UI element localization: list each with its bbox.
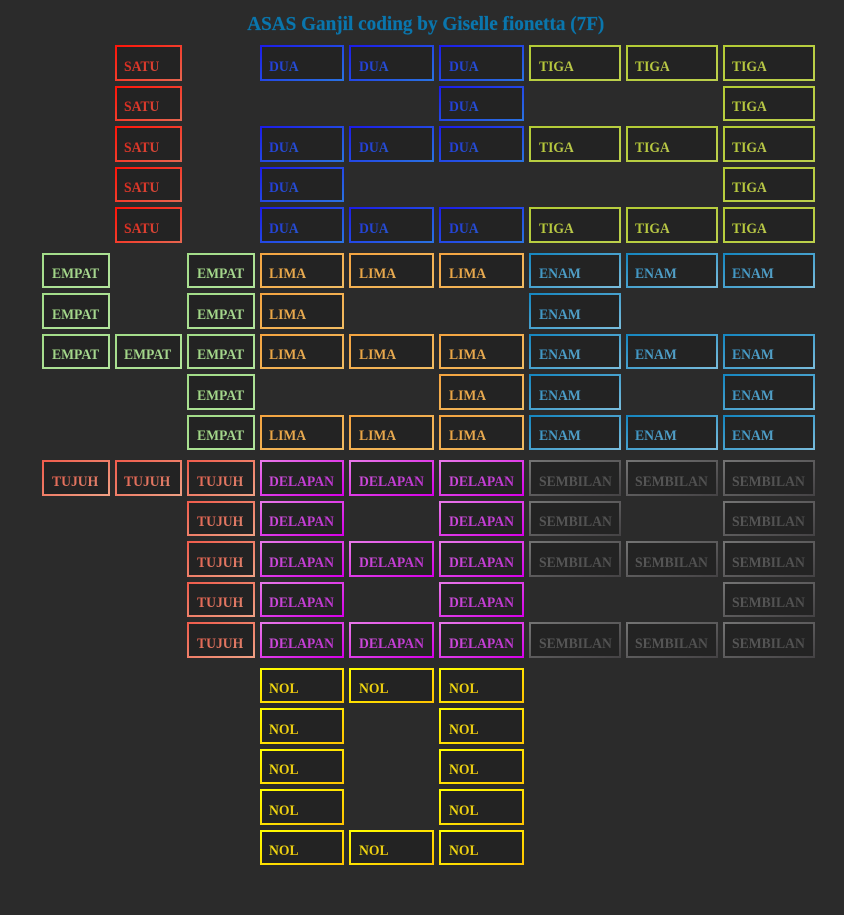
title: ASAS Ganjil coding by Giselle fionetta (7F) [247,13,605,35]
EMPAT box: EMPAT [197,266,244,282]
SEMBILAN box: SEMBILAN [539,636,612,652]
DUA box: DUA [359,221,389,237]
TUJUH box [187,460,255,496]
LIMA box [439,374,524,410]
NOL box: NOL [359,843,389,859]
SEMBILAN box: SEMBILAN [539,474,612,490]
TUJUH box: TUJUH [124,474,170,490]
EMPAT box: EMPAT [52,266,99,282]
TIGA box: TIGA [635,140,670,156]
SEMBILAN box: SEMBILAN [539,555,612,571]
TUJUH box [42,460,110,496]
SATU box: SATU [124,180,159,196]
DUA box [439,45,524,81]
SATU box [115,167,182,202]
DUA box: DUA [359,140,389,156]
EMPAT box: EMPAT [197,347,244,363]
TUJUH box: TUJUH [197,514,243,530]
DUA box: DUA [269,59,299,75]
SEMBILAN box [626,460,718,496]
TUJUH box: TUJUH [197,474,243,490]
SEMBILAN box [529,460,621,496]
NOL box [349,668,434,703]
SEMBILAN box [723,622,815,658]
digit 9: SEMBILAN [529,460,815,658]
LIMA box [260,334,344,369]
DELAPAN box [349,622,434,658]
SEMBILAN box [529,541,621,577]
ENAM box [529,253,621,288]
DELAPAN box: DELAPAN [449,555,514,571]
digit 2: DUA [260,45,524,243]
LIMA box: LIMA [359,347,396,363]
ENAM box: ENAM [732,347,774,363]
ENAM box: ENAM [732,388,774,404]
DUA box [260,126,344,162]
EMPAT box [187,334,255,369]
TIGA box: TIGA [539,221,574,237]
ENAM box: ENAM [539,347,581,363]
NOL box: NOL [269,722,299,738]
SEMBILAN box: SEMBILAN [635,474,708,490]
TIGA box: TIGA [635,221,670,237]
SEMBILAN box [529,622,621,658]
DELAPAN box: DELAPAN [269,595,334,611]
TUJUH box [187,622,255,658]
DELAPAN box: DELAPAN [449,636,514,652]
TUJUH box [187,541,255,577]
DELAPAN box [260,460,344,496]
EMPAT box [42,293,110,329]
TUJUH box: TUJUH [197,555,243,571]
ENAM box: ENAM [539,428,581,444]
LIMA box: LIMA [269,347,306,363]
EMPAT box [187,374,255,410]
ENAM box: ENAM [539,266,581,282]
LIMA box: LIMA [269,266,306,282]
SEMBILAN box: SEMBILAN [732,555,805,571]
DUA box: DUA [359,59,389,75]
TIGA box: TIGA [539,140,574,156]
DELAPAN box: DELAPAN [269,514,334,530]
SEMBILAN box: SEMBILAN [635,555,708,571]
DUA box: DUA [269,221,299,237]
DELAPAN box: DELAPAN [269,555,334,571]
DELAPAN box [439,541,524,577]
ENAM box [626,415,718,450]
SEMBILAN box: SEMBILAN [635,636,708,652]
DUA box: DUA [269,180,299,196]
LIMA box [439,253,524,288]
ENAM box [529,374,621,410]
TUJUH box: TUJUH [52,474,98,490]
TUJUH box [187,582,255,617]
EMPAT box [187,253,255,288]
DUA box [349,207,434,243]
ENAM box: ENAM [635,428,677,444]
TIGA box: TIGA [635,59,670,75]
SEMBILAN box: SEMBILAN [732,514,805,530]
TIGA box [723,207,815,243]
digit 0: NOL [260,668,524,865]
DELAPAN box [260,582,344,617]
NOL box: NOL [269,681,299,697]
LIMA box: LIMA [449,388,486,404]
digit 6: ENAM [529,253,815,450]
NOL box: NOL [449,722,479,738]
SEMBILAN box: SEMBILAN [732,474,805,490]
DUA box [260,167,344,202]
ENAM box: ENAM [732,428,774,444]
ENAM box [529,415,621,450]
EMPAT box [42,334,110,369]
DUA box: DUA [449,221,479,237]
TIGA box [723,86,815,121]
SATU box [115,86,182,121]
ENAM box [723,374,815,410]
EMPAT box: EMPAT [197,428,244,444]
SEMBILAN box [626,622,718,658]
TIGA box: TIGA [732,59,767,75]
SEMBILAN box: SEMBILAN [732,595,805,611]
ENAM box: ENAM [635,347,677,363]
NOL box: NOL [269,762,299,778]
EMPAT box [187,293,255,329]
TIGA box: TIGA [732,221,767,237]
DUA box [349,45,434,81]
NOL box [439,789,524,825]
SEMBILAN box [626,541,718,577]
LIMA box [439,334,524,369]
ENAM box [723,253,815,288]
ENAM box [529,334,621,369]
ENAM box: ENAM [539,388,581,404]
TIGA box: TIGA [732,140,767,156]
EMPAT box: EMPAT [124,347,171,363]
DELAPAN box: DELAPAN [359,555,424,571]
NOL box: NOL [269,803,299,819]
digit 1: SATU [115,45,182,243]
DUA box [260,45,344,81]
TIGA box [626,207,718,243]
DELAPAN box: DELAPAN [449,474,514,490]
LIMA box [349,415,434,450]
LIMA box: LIMA [269,307,306,323]
LIMA box: LIMA [449,347,486,363]
LIMA box [349,253,434,288]
DELAPAN box: DELAPAN [449,514,514,530]
DUA box: DUA [449,99,479,115]
TIGA box: TIGA [539,59,574,75]
DELAPAN box [439,582,524,617]
digit 8: DELAPAN [260,460,524,658]
TUJUH box [115,460,182,496]
LIMA box [260,253,344,288]
LIMA box [260,415,344,450]
DELAPAN box [439,460,524,496]
LIMA box [439,415,524,450]
SATU box: SATU [124,59,159,75]
SEMBILAN box [723,582,815,617]
SATU box: SATU [124,99,159,115]
SATU box [115,45,182,81]
ENAM box: ENAM [732,266,774,282]
NOL box [260,749,344,784]
EMPAT box: EMPAT [197,388,244,404]
DELAPAN box [260,501,344,536]
TUJUH box: TUJUH [197,636,243,652]
NOL box: NOL [269,843,299,859]
digit 4: EMPAT [42,253,255,450]
EMPAT box: EMPAT [52,347,99,363]
DUA box [349,126,434,162]
DELAPAN box [260,622,344,658]
NOL box: NOL [449,843,479,859]
TIGA box [723,167,815,202]
TIGA box [723,126,815,162]
DUA box [439,86,524,121]
DUA box: DUA [269,140,299,156]
SEMBILAN box [723,460,815,496]
SATU box [115,207,182,243]
TIGA box [529,126,621,162]
LIMA box: LIMA [269,428,306,444]
DELAPAN box [439,501,524,536]
ENAM box: ENAM [539,307,581,323]
DELAPAN box: DELAPAN [269,636,334,652]
NOL box [439,668,524,703]
NOL box: NOL [449,762,479,778]
SATU box [115,126,182,162]
TIGA box [626,126,718,162]
DUA box [260,207,344,243]
EMPAT box [42,253,110,288]
LIMA box [260,293,344,329]
ENAM box [626,253,718,288]
LIMA box: LIMA [359,266,396,282]
DUA box: DUA [449,59,479,75]
NOL box [260,830,344,865]
SATU box: SATU [124,221,159,237]
digit 3: TIGA [529,45,815,243]
NOL box [439,708,524,744]
SEMBILAN box [723,501,815,536]
ENAM box [626,334,718,369]
EMPAT box [187,415,255,450]
SEMBILAN box: SEMBILAN [539,514,612,530]
ENAM box [723,334,815,369]
NOL box [260,668,344,703]
NOL box [439,749,524,784]
DUA box: DUA [449,140,479,156]
ENAM box [723,415,815,450]
DELAPAN box [349,541,434,577]
digit 5: LIMA [260,253,524,450]
TIGA box [626,45,718,81]
NOL box [260,708,344,744]
DELAPAN box [349,460,434,496]
DELAPAN box: DELAPAN [359,636,424,652]
NOL box [439,830,524,865]
TIGA box: TIGA [732,180,767,196]
SEMBILAN box: SEMBILAN [732,636,805,652]
LIMA box [349,334,434,369]
DELAPAN box [439,622,524,658]
SEMBILAN box [529,501,621,536]
DUA box [439,207,524,243]
DELAPAN box: DELAPAN [359,474,424,490]
TUJUH box [187,501,255,536]
NOL box: NOL [359,681,389,697]
DELAPAN box: DELAPAN [269,474,334,490]
DELAPAN box [260,541,344,577]
EMPAT box: EMPAT [52,307,99,323]
LIMA box: LIMA [449,266,486,282]
digit 7: TUJUH [42,460,255,658]
LIMA box: LIMA [359,428,396,444]
NOL box: NOL [449,681,479,697]
SEMBILAN box [723,541,815,577]
TIGA box [529,45,621,81]
DELAPAN box: DELAPAN [449,595,514,611]
TIGA box [723,45,815,81]
ENAM box: ENAM [635,266,677,282]
ENAM box [529,293,621,329]
NOL box [260,789,344,825]
EMPAT box: EMPAT [197,307,244,323]
DUA box [439,126,524,162]
TIGA box: TIGA [732,99,767,115]
EMPAT box [115,334,182,369]
LIMA box: LIMA [449,428,486,444]
NOL box [349,830,434,865]
NOL box: NOL [449,803,479,819]
SATU box: SATU [124,140,159,156]
TIGA box [529,207,621,243]
TUJUH box: TUJUH [197,595,243,611]
